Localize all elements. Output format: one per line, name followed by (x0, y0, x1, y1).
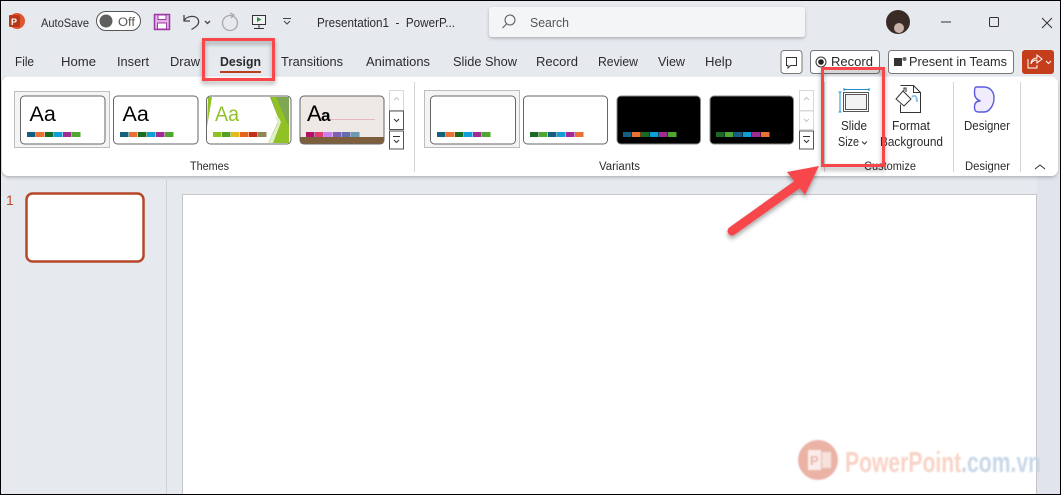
slide size button: Slide (841, 119, 867, 133)
ribbon tabs: File (15, 55, 34, 69)
AutoSave label: AutoSave (41, 16, 89, 30)
ribbon tabs (15, 55, 732, 73)
ribbon tabs: Insert (117, 55, 150, 69)
record button (810, 50, 880, 74)
slide number: 1 (6, 192, 14, 208)
theme thumbnail 2 (114, 96, 198, 144)
gallery scroll buttons (390, 90, 404, 149)
highlight box: Design tab (204, 40, 274, 80)
share button (1022, 50, 1054, 74)
present in teams button: Present in Teams (909, 55, 1007, 69)
watermark logo (798, 440, 838, 480)
watermark logo: P (810, 453, 819, 468)
icon: redo (222, 13, 238, 30)
ribbon tabs: Slide Show (453, 55, 518, 69)
search box: Search (530, 16, 569, 30)
document title: Presentation1 - PowerP... (317, 16, 455, 30)
record button: Record (831, 55, 873, 69)
variant thumbnail 4 (710, 96, 794, 144)
ribbon tabs: Record (536, 55, 578, 69)
variant thumbnail 2 (524, 96, 608, 144)
AutoSave toggle (96, 12, 140, 30)
theme thumbnail 4 (300, 96, 384, 144)
icon: slideshow (252, 16, 266, 28)
slide thumbnail (26, 194, 144, 262)
ribbon tabs: Design (220, 55, 261, 69)
ribbon tabs: Transitions (281, 55, 343, 69)
designer group label: Designer (965, 161, 1010, 173)
user avatar (886, 10, 910, 34)
theme thumbnail 4: A (307, 101, 322, 126)
format background button (880, 86, 943, 149)
customize label: Customize (864, 161, 916, 173)
themes gallery (14, 90, 404, 173)
icon: customize arrow (283, 18, 291, 24)
theme thumbnail 4: a (321, 106, 331, 125)
theme thumbnail 3: Aa (215, 102, 239, 126)
main slide canvas (182, 194, 1036, 495)
arrow pointing to Slide Size (732, 166, 819, 231)
ribbon tabs: Review (598, 55, 639, 69)
theme thumbnail 2: Aa (122, 102, 149, 126)
variant scroll buttons (800, 90, 814, 149)
ribbon tabs: Home (61, 55, 96, 69)
variant thumbnail 3 (617, 96, 700, 144)
icon: undo (184, 15, 210, 30)
ribbon tabs: Animations (366, 55, 430, 69)
title bar (9, 7, 1052, 37)
theme thumbnail 3 (206, 96, 291, 144)
ribbon tabs: View (658, 55, 686, 69)
collapse ribbon chevron (1035, 165, 1045, 169)
comments button (781, 50, 802, 74)
icon: PowerPoint logo: P (11, 17, 17, 27)
watermark (798, 440, 1041, 480)
themes label: Themes (190, 161, 229, 173)
theme thumbnail 1 (20, 96, 105, 144)
designer button: Designer (964, 119, 1010, 133)
window controls (941, 18, 1052, 28)
ribbon tabs: Draw (170, 55, 201, 69)
present in teams button (888, 50, 1014, 74)
format background button: Format (892, 119, 930, 133)
highlight box: Slide Size (822, 68, 884, 166)
icon: PowerPoint logo (9, 13, 25, 29)
variants gallery (424, 90, 814, 173)
variants label: Variants (599, 161, 640, 173)
icon: designer (974, 87, 994, 112)
designer button (964, 87, 1010, 133)
ribbon tabs: Help (705, 55, 732, 69)
search box (489, 7, 805, 37)
AutoSave toggle: Off (118, 17, 136, 29)
icon: slide size (838, 88, 869, 112)
icon: format background (896, 86, 920, 112)
icon: save (154, 14, 170, 30)
theme thumbnail 1: Aa (30, 102, 56, 126)
slide size button: Size (838, 135, 859, 149)
format background button: Background (880, 135, 943, 149)
variant thumbnail 1 (430, 96, 516, 144)
ribbon panel (2, 76, 1058, 176)
slide size button (838, 88, 869, 149)
